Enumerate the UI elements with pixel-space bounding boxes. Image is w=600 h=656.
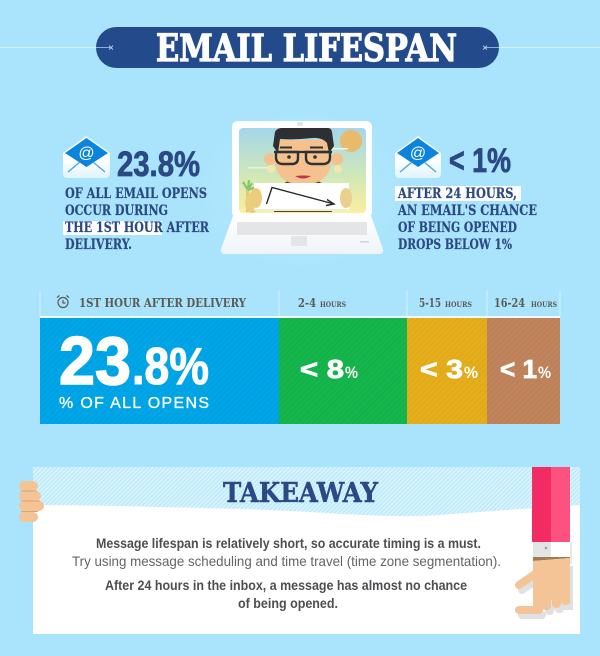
man portrait <box>264 128 343 212</box>
right highlight <box>395 186 521 201</box>
right statistic: less than 1% <box>395 136 537 253</box>
icon: right email envelope: @ <box>410 145 426 162</box>
left description <box>65 186 210 253</box>
paper with declining arrow chart <box>250 183 352 211</box>
left big number: 23.8% <box>117 145 200 184</box>
bar: first hour <box>40 318 279 424</box>
column headers: HOURS <box>445 300 472 309</box>
icon: left email envelope <box>63 136 110 178</box>
bar: 2-4 hours: % <box>345 363 358 382</box>
hand shadow <box>518 566 573 619</box>
left highlight <box>63 221 162 235</box>
bar: 5-15 hours <box>407 318 487 424</box>
bar: 2-4 hours: < 8 <box>300 354 344 384</box>
laptop base <box>221 216 383 254</box>
bar: 16-24 hours: < 1 <box>500 354 537 384</box>
takeaway text <box>72 535 501 611</box>
right big number: < 1% <box>449 142 511 180</box>
bar: first hour: .8% <box>132 338 209 396</box>
left description: THE 1ST HOUR AFTER <box>65 220 210 236</box>
left description: OCCUR DURING <box>65 203 168 219</box>
bar: 16-24 hours <box>487 318 560 424</box>
bar: 16-24 hours: % <box>538 363 551 382</box>
column headers: HOURS <box>531 300 557 309</box>
takeaway text: Message lifespan is relatively short, so accurate timing is a must. <box>96 535 481 551</box>
takeaway text: After 24 hours in the inbox, a message has almost no chance <box>105 577 467 593</box>
column headers: 5-15 <box>419 296 441 310</box>
icon: left email envelope: @ <box>78 145 95 162</box>
column headers: 1ST HOUR AFTER DELIVERY <box>79 295 247 310</box>
column headers: 16-24 <box>494 296 525 310</box>
title banner: × <box>482 43 488 54</box>
takeaway text: of being opened. <box>238 595 338 611</box>
title banner: EMAIL LIFESPAN <box>156 26 457 70</box>
icon: right arm and hand <box>515 467 573 619</box>
icon: right email envelope <box>395 136 441 178</box>
title banner <box>0 26 600 70</box>
panel: takeaway <box>19 467 580 634</box>
heading: takeaway: TAKEAWAY <box>223 478 379 509</box>
bar: first hour: % OF ALL OPENS <box>59 395 209 412</box>
bar: 2-4 hours <box>279 318 407 424</box>
hand <box>515 558 570 614</box>
column headers: 2-4 <box>298 296 316 310</box>
bar: 5-15 hours: % <box>464 363 478 382</box>
left description: DELIVERY. <box>65 237 132 253</box>
title banner: × <box>108 43 114 54</box>
icon: left hand fingers <box>19 481 44 522</box>
right description: AN EMAIL'S CHANCE <box>397 203 537 219</box>
bar: 5-15 hours: < 3 <box>420 354 463 384</box>
sleeve <box>532 467 570 542</box>
palm tree <box>243 180 259 213</box>
cuff <box>533 542 572 564</box>
panel background <box>33 467 580 634</box>
laptop screen <box>232 121 372 218</box>
illustration: laptop with man holding a declining chart <box>221 121 383 254</box>
right description: DROPS BELOW 1% <box>398 237 512 253</box>
column headers: HOURS <box>320 300 346 309</box>
right description <box>397 186 537 253</box>
bar: first hour: 23 <box>59 323 131 399</box>
right description: AFTER 24 HOURS, <box>397 186 517 202</box>
left description: OF ALL EMAIL OPENS <box>65 186 207 202</box>
column headers <box>40 291 560 318</box>
right description: OF BEING OPENED <box>398 220 517 236</box>
takeaway text: Try using message scheduling and time travel (time zone segmentation). <box>72 553 501 569</box>
icon: alarm clock <box>57 296 69 308</box>
chart: email opens by time after delivery <box>40 291 560 424</box>
left statistic: 23.8% <box>63 136 210 253</box>
